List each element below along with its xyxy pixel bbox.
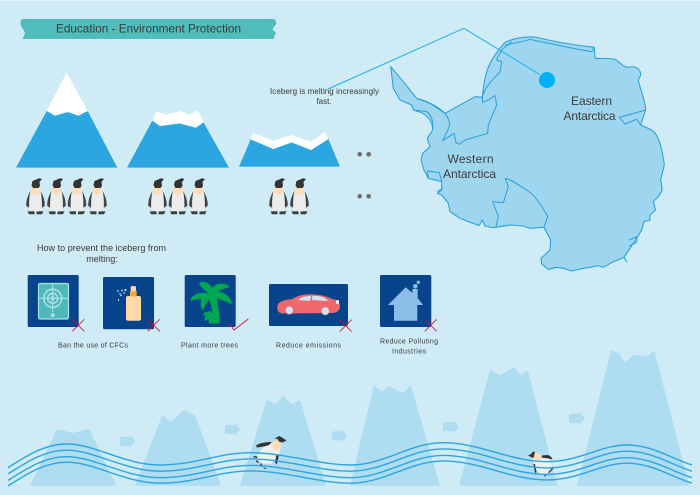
text: iceberg melting: Iceberg is melting increasingly bbox=[270, 87, 379, 96]
label: Western Antarctica bbox=[443, 152, 496, 181]
label: Eastern Antarctica bbox=[564, 94, 616, 123]
label: Western Antarctica: Western bbox=[448, 152, 494, 166]
pointer line bbox=[328, 28, 539, 89]
penguins: four bbox=[26, 178, 107, 214]
heading: how to prevent: How to prevent the iceberg from bbox=[37, 243, 166, 253]
icon: spray bottle bbox=[103, 277, 154, 329]
waves bbox=[8, 443, 692, 486]
ellipsis dots bbox=[357, 152, 371, 199]
check mark bbox=[229, 319, 248, 330]
cross mark 2 bbox=[148, 319, 160, 331]
label: Western Antarctica: Antarctica bbox=[443, 167, 496, 181]
heading: how to prevent: melting: bbox=[86, 254, 118, 264]
caption: reduce polluting industries: Industries bbox=[392, 348, 426, 356]
swimming penguin right bbox=[528, 452, 554, 477]
label: Eastern Antarctica: Antarctica bbox=[564, 109, 616, 123]
text: iceberg melting bbox=[270, 87, 379, 106]
location dot bbox=[539, 72, 555, 88]
caption: reduce emissions: Reduce emissions bbox=[276, 342, 342, 350]
icon: palm tree bbox=[185, 275, 236, 327]
caption: ban CFCs: Ban the use of CFCs bbox=[58, 342, 128, 350]
icon: CFC appliance bbox=[28, 275, 79, 327]
title banner bbox=[20, 19, 276, 39]
caption: reduce polluting industries bbox=[380, 338, 438, 356]
mountain 3: small iceberg bbox=[239, 132, 340, 167]
heading: how to prevent bbox=[37, 243, 166, 264]
cross mark 3 bbox=[340, 320, 352, 332]
background icebergs bbox=[30, 351, 689, 486]
caption: reduce polluting industries: Reduce Polluting bbox=[380, 338, 438, 346]
text: iceberg melting: fast. bbox=[316, 97, 332, 106]
caption: plant trees: Plant more trees bbox=[181, 342, 238, 350]
penguins: three bbox=[148, 178, 208, 214]
icon: factory house bbox=[380, 275, 431, 327]
label: Eastern Antarctica: Eastern bbox=[571, 94, 612, 108]
mountain 2: medium iceberg bbox=[127, 110, 229, 168]
arrows between icebergs bbox=[120, 412, 585, 448]
cross mark 4 bbox=[425, 319, 437, 331]
map of Antarctica bbox=[391, 37, 664, 271]
icon: car bbox=[269, 284, 348, 326]
title: Education - Environment Protection bbox=[56, 22, 241, 36]
swimming penguin left bbox=[253, 436, 286, 469]
cross mark 1 bbox=[72, 319, 84, 331]
mountain 1: tall iceberg bbox=[16, 73, 117, 168]
penguins: two bbox=[269, 178, 309, 214]
